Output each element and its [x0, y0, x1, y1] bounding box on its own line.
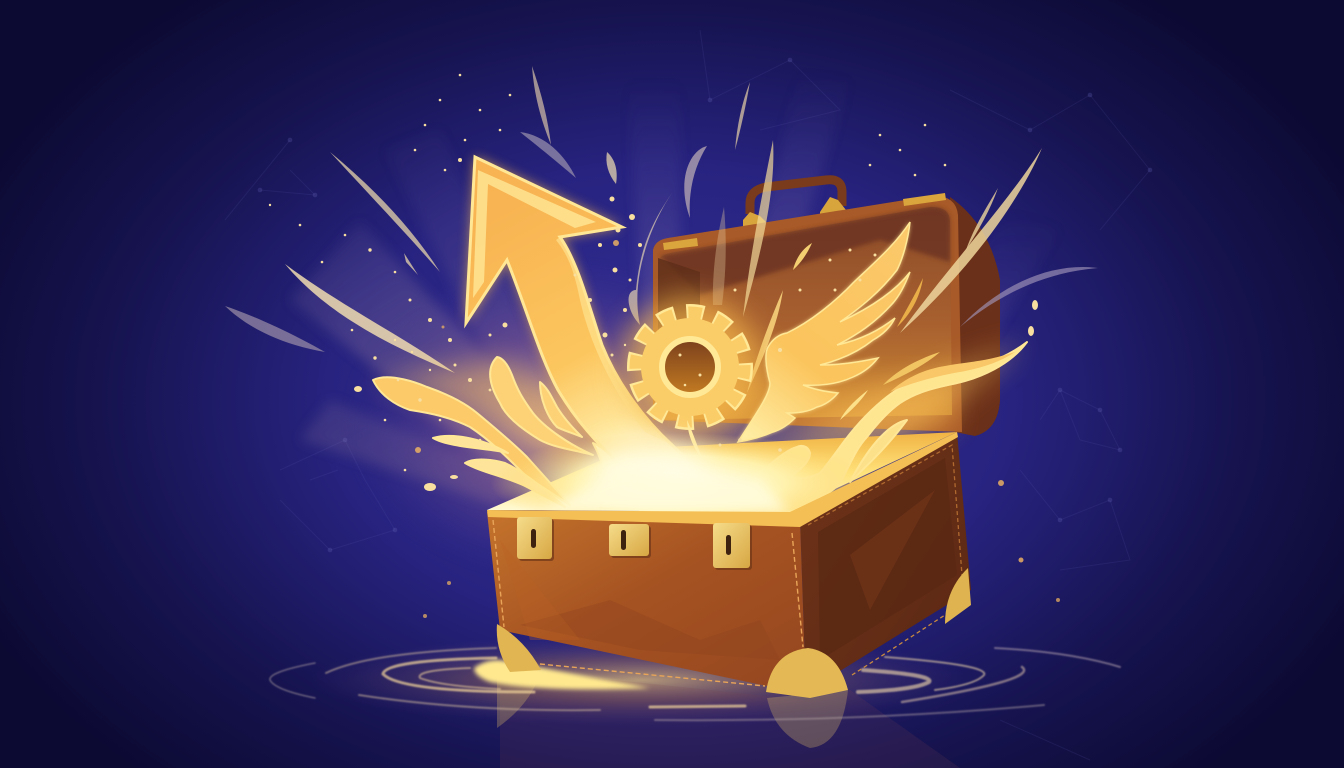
water ripples: [270, 648, 1120, 720]
lid right side: [950, 197, 1000, 436]
lid interior: [658, 207, 952, 420]
lid bottom glow: [660, 380, 952, 430]
lid interior top shade: [660, 207, 950, 295]
arrow: [466, 157, 725, 498]
splash: [373, 342, 1027, 512]
lid interior left shade: [658, 258, 700, 400]
distant lights: [415, 240, 1060, 618]
reflection: [497, 668, 960, 768]
splash glow: [373, 342, 1027, 500]
gear: [620, 297, 760, 460]
case opening: [487, 432, 957, 510]
handle: [750, 180, 842, 214]
central light: [490, 433, 870, 533]
briefcase lid: [653, 180, 1000, 436]
wing: [738, 222, 910, 442]
middle clasp: [609, 524, 651, 558]
briefcase body: [487, 432, 971, 692]
rim: [487, 432, 958, 527]
water glow: [310, 634, 970, 726]
glowing puddle: [474, 660, 650, 689]
side face: [800, 432, 971, 692]
corner caps: [497, 568, 971, 698]
constellation lines: [225, 30, 1152, 760]
central purple glow: [340, 255, 780, 585]
translucent streaks over lid: [713, 140, 1098, 393]
corner tabs: [663, 238, 698, 250]
light streaks behind: [225, 66, 750, 373]
handle clasps: [743, 212, 766, 230]
right clasp: [713, 523, 752, 570]
front face: [487, 512, 806, 692]
lid outer frame: [653, 196, 962, 432]
left clasp: [517, 517, 554, 561]
light beams: [290, 70, 1060, 505]
sparkles: [269, 74, 1038, 491]
